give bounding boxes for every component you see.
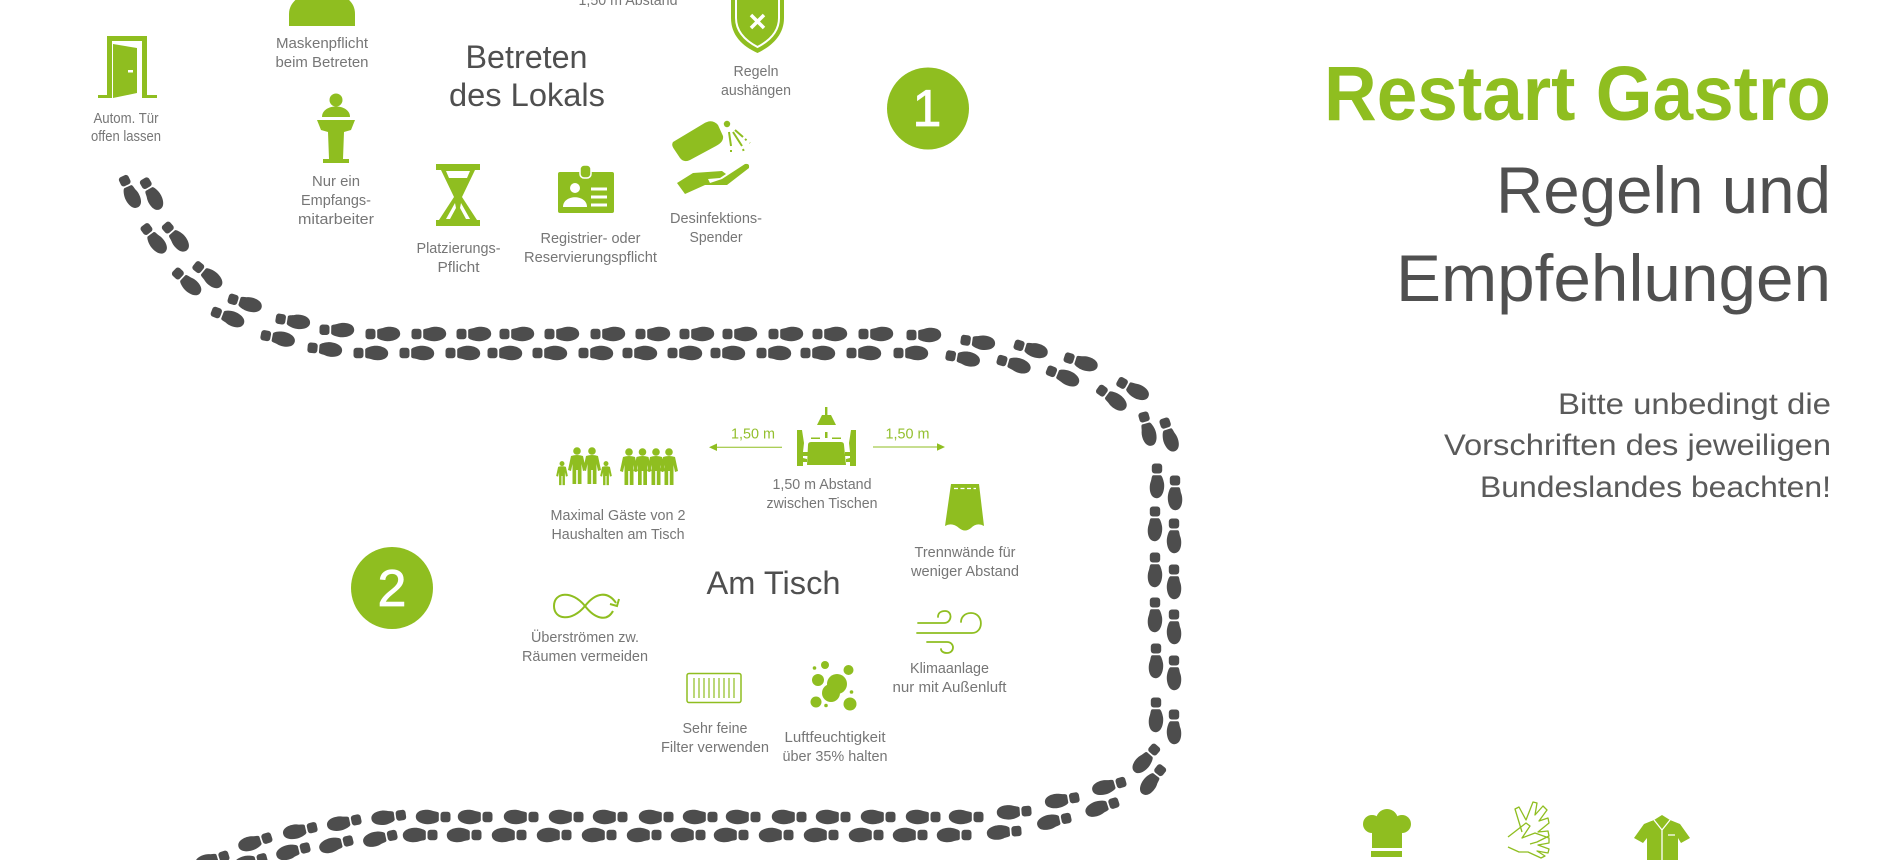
item: seating obligation: Pflicht bbox=[438, 260, 480, 276]
item: humidity above 35 percent: Luftfeuchtigkeit bbox=[784, 730, 886, 746]
item: mask obligation: beim Betreten bbox=[276, 55, 368, 71]
heading: Betreten des Lokals: Betreten bbox=[466, 39, 588, 75]
item: very fine filters: Filter verwenden bbox=[661, 740, 769, 756]
item: automatic door: offen lassen bbox=[91, 129, 161, 145]
item: avoid overflow between rooms: Räumen vermeiden bbox=[522, 649, 648, 665]
item: registration or reservation: Registrier- oder bbox=[540, 231, 641, 247]
item: post rules: aushängen bbox=[721, 83, 791, 99]
item: disinfectant dispenser bbox=[670, 121, 762, 246]
item: guests of two households: Maximal Gäste von 2 bbox=[550, 508, 686, 524]
item: table distance with arrows: 1,50 m bbox=[731, 426, 775, 442]
item: registration or reservation bbox=[524, 165, 657, 266]
item: mask obligation bbox=[276, 0, 368, 71]
heading: Am Tisch: Am Tisch bbox=[706, 565, 840, 601]
item: avoid overflow between rooms: Überströmen zw. bbox=[531, 628, 639, 646]
item: post rules bbox=[721, 0, 791, 99]
notice text: Bitte unbedingt die bbox=[1558, 388, 1831, 421]
item: table distance with arrows: 1,50 m bbox=[886, 426, 930, 442]
item: one reception employee: Nur ein bbox=[312, 174, 360, 190]
heading: Betreten des Lokals: des Lokals bbox=[449, 77, 605, 113]
item: very fine filters: Sehr feine bbox=[682, 721, 748, 737]
item: seating obligation bbox=[416, 164, 501, 276]
item: mask obligation: Maskenpflicht bbox=[276, 36, 368, 52]
subtitle: Regeln und Empfehlungen: Regeln und bbox=[1496, 153, 1831, 227]
item: table distance with arrows: 1,50 m Abstand bbox=[772, 477, 872, 493]
item: registration or reservation: Reservierungspflicht bbox=[524, 250, 657, 266]
item: disinfectant dispenser: Spender bbox=[690, 230, 743, 246]
staff icons row bbox=[1363, 802, 1690, 860]
item: air conditioning with outside air: Klimaanlage bbox=[910, 661, 989, 677]
number badge 2 bbox=[351, 547, 433, 629]
title block bbox=[1324, 51, 1831, 504]
icon: hands bbox=[1508, 802, 1549, 858]
item: very fine filters bbox=[661, 674, 769, 756]
panel: Betreten des Lokals bbox=[91, 0, 969, 276]
item: post rules: Regeln bbox=[734, 64, 778, 80]
item: air conditioning with outside air: nur mit Außenluft bbox=[892, 680, 1006, 696]
item: automatic door bbox=[91, 36, 161, 145]
subtitle: Regeln und Empfehlungen: Empfehlungen bbox=[1396, 241, 1831, 315]
item: air conditioning with outside air bbox=[892, 611, 1006, 696]
number badge 1 bbox=[887, 68, 969, 150]
notice text: Bundeslandes beachten! bbox=[1480, 471, 1831, 504]
item: partition walls: Trennwände für bbox=[914, 545, 1016, 561]
item: guests of two households: Haushalten am Tisch bbox=[552, 527, 684, 543]
shirt details bbox=[1654, 820, 1675, 860]
number badge 2: 2 bbox=[378, 560, 406, 618]
item: partition walls bbox=[910, 484, 1019, 580]
item: table distance with arrows: zwischen Tischen bbox=[766, 496, 878, 512]
footprints path bbox=[116, 173, 1182, 860]
icon: shirt bbox=[1634, 815, 1690, 860]
title: Restart Gastro: Restart Gastro bbox=[1324, 51, 1831, 137]
icon: chef hat bbox=[1363, 809, 1411, 857]
item: disinfectant dispenser: Desinfektions- bbox=[670, 211, 762, 227]
item: automatic door: Autom. Tür bbox=[94, 111, 159, 127]
item: partition walls: weniger Abstand bbox=[910, 564, 1019, 580]
item: avoid overflow between rooms bbox=[522, 595, 648, 665]
item: humidity above 35 percent bbox=[782, 661, 888, 765]
item: seating obligation: Platzierungs- bbox=[416, 241, 501, 257]
panel: Am Tisch bbox=[351, 407, 1019, 765]
item: humidity above 35 percent: über 35% halten bbox=[782, 749, 888, 765]
item: one reception employee: mitarbeiter bbox=[298, 212, 374, 228]
item: guests of two households bbox=[550, 447, 686, 543]
number badge 1: 1 bbox=[913, 80, 941, 138]
item: table distance with arrows bbox=[709, 407, 945, 512]
item: one reception employee: Empfangs- bbox=[301, 193, 371, 209]
item: one reception employee bbox=[298, 94, 374, 228]
notice text: Vorschriften des jeweiligen bbox=[1444, 429, 1831, 462]
